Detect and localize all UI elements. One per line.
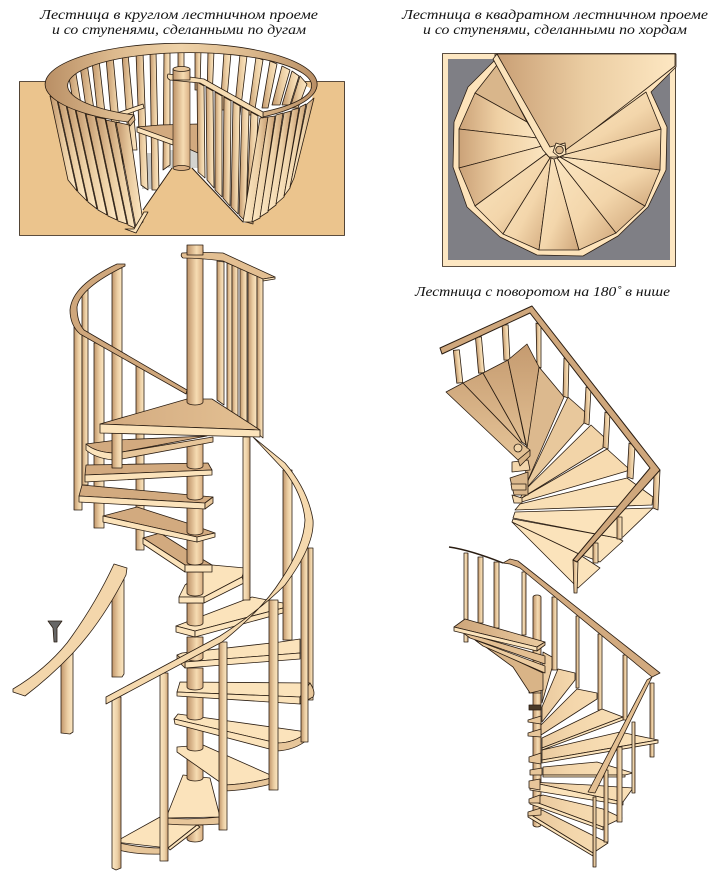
- central column: [173, 78, 190, 170]
- column cap: [173, 66, 190, 80]
- top rail: [181, 252, 275, 281]
- front right wall balusters: [243, 98, 314, 222]
- front balusters: [573, 517, 622, 593]
- front left wall balusters: [50, 96, 148, 233]
- inner right wall balusters: [197, 82, 258, 224]
- upper column: [187, 250, 203, 405]
- title: round stairwell: Лестница в круглом лестничном проеме: [39, 8, 318, 23]
- floor wedge: [128, 168, 252, 235]
- handrail: [449, 547, 660, 793]
- central post: [553, 143, 566, 157]
- column steps: [528, 686, 542, 816]
- full column base: [187, 825, 203, 842]
- baluster under landing: [243, 437, 250, 600]
- far balusters: [74, 290, 313, 700]
- grey lower wall: [96, 150, 268, 210]
- tread 11: [177, 724, 275, 791]
- panel: main spiral stair: [70, 245, 314, 870]
- panel: niche stair top view: [440, 306, 660, 593]
- tread 12: [166, 755, 220, 825]
- tread 1: [86, 436, 213, 460]
- landing treads: [446, 344, 539, 466]
- outer stringer band: [453, 54, 676, 256]
- title: square stairwell: и со ступенями, сделанными по хордам: [423, 23, 687, 38]
- lower treads: [528, 652, 658, 856]
- stringer to center: [493, 54, 566, 157]
- tread 6: [179, 565, 245, 603]
- near upper baluster: [112, 268, 122, 468]
- small inner steps: [510, 460, 530, 503]
- wedge top landing: [497, 54, 675, 155]
- tread 8: [177, 637, 300, 668]
- top landing: [100, 399, 260, 437]
- front balusters: [593, 722, 635, 867]
- radial treads: [459, 65, 661, 250]
- grey well: [448, 59, 670, 260]
- panel: detached rail detail: [13, 564, 127, 734]
- column cap: [187, 245, 203, 255]
- rear balusters: [68, 48, 307, 190]
- well opening: [50, 55, 314, 228]
- tread 3: [79, 474, 213, 509]
- title: round stairwell: и со ступенями, сделанными по дугам: [52, 23, 306, 38]
- tread 9: [177, 668, 314, 704]
- tread 7: [176, 597, 283, 637]
- tread 5: [143, 533, 212, 572]
- panel: niche stair perspective view: [449, 547, 660, 867]
- tread 2: [85, 442, 212, 482]
- tread 13: [115, 817, 200, 854]
- upper curved rail: [70, 264, 187, 394]
- tread 10: [174, 696, 307, 751]
- frame: [442, 54, 676, 266]
- panel: round stairwell illustration: [20, 43, 344, 236]
- handrail: [440, 306, 660, 562]
- near lower balusters: [112, 548, 308, 870]
- title: square stairwell: Лестница в квадратном лестничном проеме: [401, 8, 708, 23]
- central post: [514, 444, 522, 452]
- title: square stairwell: [401, 8, 708, 38]
- rear balusters: [453, 323, 660, 510]
- detail posts: [61, 575, 124, 734]
- circular handrail: [45, 43, 317, 126]
- tread 4: [103, 502, 215, 542]
- back rail balusters: [217, 261, 263, 438]
- title: niche stair: Лестница с поворотом на 180˚ в нише: [414, 285, 670, 300]
- long curved rail: [106, 437, 313, 704]
- upper treads: [454, 619, 545, 693]
- curved rail piece: [13, 564, 127, 696]
- central landing tread: [92, 104, 278, 153]
- title: round stairwell: [39, 8, 318, 38]
- rear balusters: [464, 553, 654, 757]
- floor plane: [20, 82, 344, 236]
- column: [533, 595, 541, 827]
- radial treads: [512, 367, 653, 588]
- panel: square stairwell plan: [442, 54, 676, 266]
- icon: screw: [48, 621, 62, 642]
